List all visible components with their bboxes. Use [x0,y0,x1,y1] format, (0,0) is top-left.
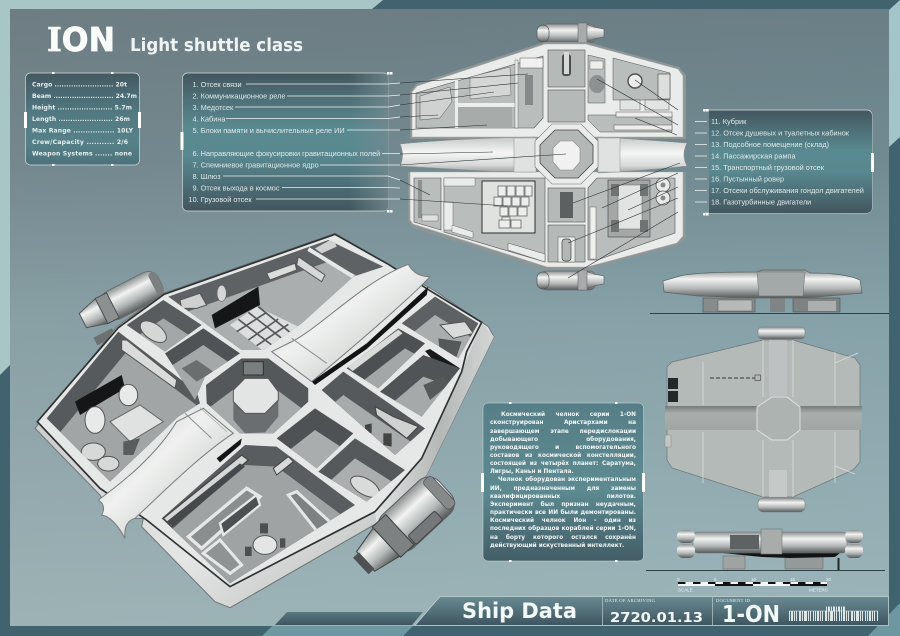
ship underside view [665,327,862,512]
text block: ship description: Космический челнок серии 1-ON [501,412,636,418]
hull top surface [37,234,482,587]
footer tab [275,612,423,625]
footer bar: ship data: Ship Data [462,599,577,623]
plan lower hull [408,172,686,270]
lower wing [98,408,242,538]
legend connector ticks [695,122,707,202]
panel: systems legend 11-18 [695,109,874,216]
panel: systems legend 1-10: 3. Медотсек [192,103,234,112]
panel: systems legend 1-10: 1. Отсек связи [192,80,242,89]
panel: systems legend 1-10 [180,72,400,212]
icon: upper engine [76,268,173,346]
title [47,20,303,59]
scale bar: 20 [826,577,832,582]
text block: ship description: сконструирован Аристархами на [490,420,636,426]
text block: ship description [490,411,636,549]
panel: systems legend 11-18: 15. Транспортный грузовой отсек [711,163,825,172]
panel: story background [481,402,645,562]
text block: ship description: руководящего и вспомогательного [490,445,636,451]
panel: ship specifications: Max Range ................. 10LY [32,128,134,134]
panel: ship specifications: Cargo ......................... 20t [32,82,127,88]
panel: ship specifications: Crew/Capacity ........... 2/6 [32,139,128,146]
text block: ship description: Эксперимент был признан неудачным, [490,502,636,508]
legend connector lines [223,83,400,199]
panel: systems legend 11-18: 18. Газотурбинные двигатели [711,197,811,206]
footer bar: ship data: 1-ON [722,602,780,628]
hull right skirt [375,322,494,523]
panel: ship specifications [24,72,141,166]
ship isometric cutaway [33,233,494,608]
text block: ship description: последних образцов кораблей серии 1-ON, [490,526,636,532]
panel: systems legend 1-10: 6. Направляющие фокусировки гравитационных полей [192,149,380,158]
panel: systems legend 1-10: 9. Отсек выхода в космос [192,183,280,192]
text block: ship description: составов из космической констелляции, [490,453,636,459]
ship side view [650,270,889,314]
panel: systems legend 11-18: 11. Кубрик [711,117,747,126]
upper wing [272,264,430,385]
panel: systems legend 1-10: 5. Блоки памяти и вычислительные реле ИИ [192,126,345,135]
icon: plan top engine [537,23,604,43]
panel: systems legend 11-18: 13. Подсобное помещение (склад) [711,140,829,149]
panel: ship specifications: Weapon Systems ....... none [32,150,132,158]
text block: ship description: Космический челнок Ион - один из [490,518,636,524]
panel: ship specifications: Height ....................... 5.7m [32,104,132,112]
room: cargo hold [168,240,384,350]
plan central octagon [535,124,598,184]
central octagon chamber [206,358,308,434]
scale bar: METERS [809,588,828,592]
text block: ship description: Лигры, Каньн и Пентала. [490,469,574,475]
text block: ship description: ИИ, предназначенным для замены [490,486,636,492]
central core column [233,378,278,433]
rooms: right quadrant [275,295,480,522]
ship front view [646,529,885,570]
plan wings [400,137,687,173]
text block: ship description: практически все ИИ были демонтированы. [490,510,636,516]
room: crew quarters [162,445,355,584]
icon: lower engine [345,471,460,583]
scale bar: SCALE [678,588,693,592]
footer bar: ship data [415,596,888,628]
barcode [789,609,878,616]
text block: ship description: квалифицированных пилотов. [490,494,636,500]
room: hatch bay [165,328,240,400]
text block: ship description: действующий искуственный интеллект. [490,543,624,549]
panel: systems legend 1-10: 4. Кабина [192,114,226,123]
ship top-view deck plan [400,23,687,290]
room: engine service [126,300,202,352]
panel: systems legend 1-10: 7. Спемниевое гравитационное ядро [192,160,319,169]
panel: ship specifications: Beam .......................... 24.7m [32,93,137,100]
scale bar: 10 [751,577,757,582]
text block: ship description: Челнок оборудован экспериментальным [498,477,636,483]
text block: ship description: добывающего оборудования, [490,437,636,443]
icon: plan bottom engine [537,270,604,290]
text block: ship description: на борту которого остался сохранён [490,535,636,541]
panel: systems legend 1-10: 8. Шлюз [192,172,221,181]
ship hull base [35,233,494,608]
title: Light shuttle class [130,36,303,56]
scale bar: 5 [714,577,717,582]
scale bar: 15 [790,577,796,582]
panel: systems legend 1-10: 2. Коммуникационное реле [192,91,286,100]
text block: ship description: завершающем этапе передислокации [490,428,636,434]
scale bar [677,577,832,592]
panel: systems legend 11-18: 17. Отсеки обслуживания гондол двигателей [711,186,864,195]
panel: systems legend 1-10: 10. Грузовой отсек [188,195,252,204]
scale bar: 0 [677,577,680,582]
panel: ship specifications: Length ....................... 26m [32,116,130,123]
room: bed bay [46,332,200,482]
text block: ship description: состоящей из четырёх планет: Саратума, [490,461,636,467]
footer bar: ship data: DOCUMENT ID [716,598,751,603]
panel: systems legend 11-18: 14. Пассажирская рампа [711,151,796,160]
panel: systems legend 11-18: 16. Пустынный ровер [711,174,784,183]
footer bar: ship data: DATE OF ARCHIVING [605,598,656,603]
plan leader lines [400,74,680,278]
plan upper hull [410,42,686,139]
footer bar: ship data: 2720.01.13 [610,610,703,626]
title: ION [47,20,115,59]
panel: systems legend 11-18: 12. Отсек душевых и туалетных кабинок [711,128,850,137]
